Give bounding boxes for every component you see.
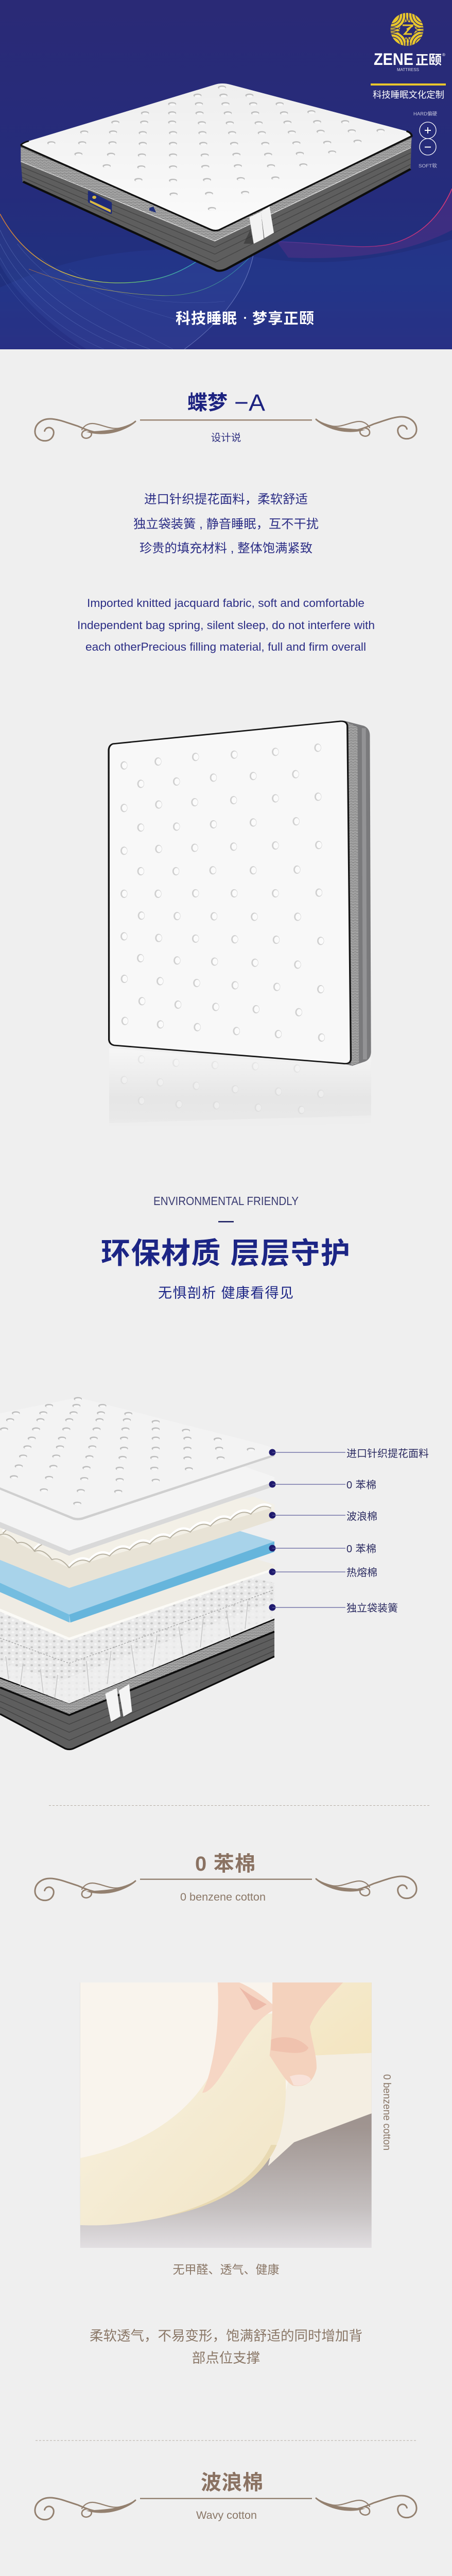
product: upright mattress [109,721,371,1130]
callout: 波浪棉 [269,1511,377,1522]
hang tags [105,1684,132,1722]
text block: Chinese description: 进口针织提花面料，柔软舒适 [144,493,308,506]
callout: 0 苯棉: 0 苯棉 [346,1479,376,1491]
section heading: 波浪棉: Wavy cotton [196,2510,257,2521]
layer: pocket springs [0,1578,274,1704]
section heading: 蝶梦-A: 设计说 [211,432,241,444]
section heading: environmental friendly: 环保材质 层层守护 [101,1237,350,1270]
hero slogan: 科技睡眠 [176,310,237,327]
section heading: 波浪棉: 波浪棉 [201,2471,263,2494]
callout: 热熔棉: 热熔棉 [346,1567,377,1579]
product: hero mattress [21,83,412,271]
photo: wave foam [50,2526,421,2576]
photo: hand pressing foam [80,1982,372,2248]
text block: 0 苯棉 description: 柔软透气，不易变形，饱满舒适的同时增加背 [90,2328,362,2344]
text block: Chinese description: 珍贵的填充材料 , 整体饱满紧致 [140,541,312,555]
hand [202,1982,343,2093]
base mattress [0,1618,274,1749]
side label: 0 benzene cotton: 0 benzene cotton [381,2074,392,2150]
callout: 独立袋装簧: 独立袋装簧 [346,1602,398,1614]
layer: 0 benzene foam [0,1484,271,1556]
logotype: ® [442,53,445,57]
layer: wave foam [0,1503,274,1588]
layer: quilted fabric [0,1397,274,1520]
callout: 独立袋装簧 [269,1602,398,1614]
logotype: 正颐 [415,53,442,67]
tagline: 科技睡眠文化定制 [373,90,444,100]
layer stack illustration [0,1397,274,1749]
text block: English description [77,597,375,653]
text block: 0 苯棉 description: 部点位支撑 [192,2350,260,2366]
logotype: ZENE [374,50,413,69]
label: brand patch [88,191,112,214]
section heading: environmental friendly [101,1194,350,1301]
text block: English description: Imported knitted jacquard fabric, soft and comfortable [87,597,364,609]
section heading: 蝶梦-A [35,389,416,444]
section heading: 0 苯棉 [35,1853,416,1903]
section heading: 0 苯棉: 0 benzene cotton [180,1891,266,1903]
callout: 进口针织提花面料 [269,1448,429,1460]
hero slogan [176,310,314,327]
firmness scale [413,111,438,169]
section heading: 波浪棉 [35,2471,416,2521]
logotype [374,50,445,72]
hero slogan: 梦享正颐 [252,310,314,327]
text block: English description: Independent bag spring, silent sleep, do not interfere with [77,619,375,632]
section heading: 蝶梦-A: 蝶梦 [187,392,228,414]
panel: hero banner [0,0,452,349]
text block: Chinese description [133,493,319,555]
icon: gold emblem [390,13,423,46]
section heading: environmental friendly: 无惧剖析 健康看得见 [158,1285,293,1301]
section heading: 蝶梦-A: −A [234,389,265,416]
callout: 0 苯棉 second [269,1543,376,1555]
layer: blue foam [0,1530,274,1622]
callout: 0 苯棉 second: 0 苯棉 [346,1543,376,1555]
section heading: 0 苯棉: 0 苯棉 [195,1853,255,1875]
callout: 0 苯棉 [269,1479,376,1491]
callout: 进口针织提花面料: 进口针织提花面料 [346,1448,429,1460]
caption: 0 苯棉: 无甲醛、透气、健康 [173,2263,279,2276]
label: white hang tags [244,206,274,244]
firmness scale: SOFT软 [419,163,438,169]
decorative light waves [0,189,452,349]
logotype: MATTRESS [397,67,419,72]
callout: 热熔棉 [269,1567,377,1579]
mattress reflection [109,1048,371,1130]
text block: 0 苯棉 description [90,2328,362,2366]
section heading: environmental friendly: ENVIRONMENTAL FRIENDLY [153,1194,299,1208]
diagram: exploded mattress layers [0,1397,429,1749]
brand logo [371,13,446,99]
firmness scale: HARD偏硬 [413,111,437,117]
text block: Chinese description: 独立袋装簧 , 静音睡眠，互不干扰 [133,517,319,531]
callout: 波浪棉: 波浪棉 [346,1511,377,1522]
text block: English description: each otherPrecious filling material, full and firm overall [85,640,366,653]
layer: hot-melt cotton [0,1557,274,1640]
